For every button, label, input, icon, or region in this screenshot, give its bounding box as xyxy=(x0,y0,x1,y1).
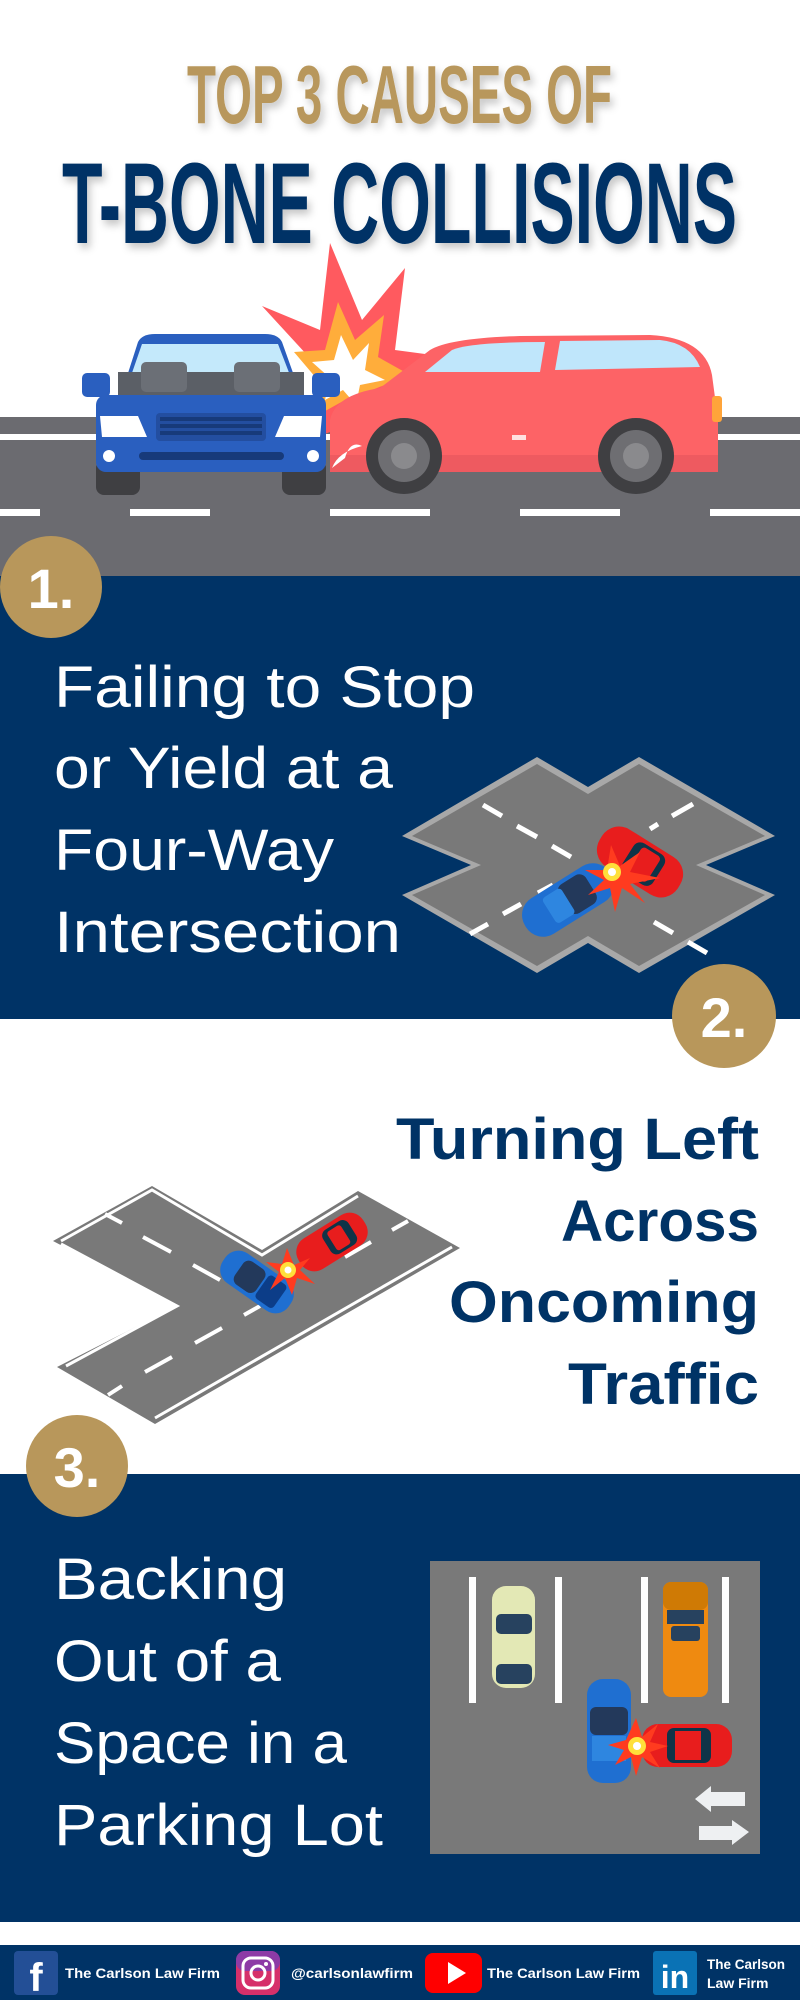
text: cause 2: Turning Left xyxy=(396,1107,759,1172)
panel: cause 3 xyxy=(0,1474,800,1922)
text: cause 1: Intersection xyxy=(54,900,401,965)
illustration: four-way intersection xyxy=(402,757,775,973)
text: cause 2: Across xyxy=(561,1189,759,1254)
footer text: youtube: The Carlson Law Firm xyxy=(487,1965,640,1981)
badge: 1: 1. xyxy=(28,557,74,620)
illustration: parking lot xyxy=(430,1561,760,1854)
text: cause 1: Four-Way xyxy=(54,818,334,883)
footer text: linkedin: Law Firm xyxy=(707,1975,768,1991)
icon: facebook: f xyxy=(29,1956,43,2000)
panel: cause 1 xyxy=(0,576,800,1019)
icon: linkedin xyxy=(653,1951,697,1995)
icon: instagram xyxy=(236,1951,280,1995)
footer xyxy=(0,1945,800,2000)
icon: linkedin: in xyxy=(661,1959,689,1995)
text: cause 3: Backing xyxy=(54,1547,287,1612)
icon: facebook xyxy=(14,1951,58,2000)
text: cause 1: or Yield at a xyxy=(54,736,394,801)
badge: 2: 2. xyxy=(701,986,747,1049)
illustration: T intersection xyxy=(53,1186,460,1424)
text: cause 3: Out of a xyxy=(54,1629,282,1694)
icon: blue car xyxy=(82,334,340,495)
footer text: instagram: @carlsonlawfirm xyxy=(291,1965,413,1981)
icon: youtube xyxy=(425,1953,482,1993)
badge: 1 xyxy=(0,536,102,638)
footer text: linkedin: The Carlson xyxy=(707,1956,785,1972)
badge: 3 xyxy=(26,1415,128,1517)
footer text: linkedin xyxy=(707,1956,785,1991)
text: cause 1 xyxy=(54,655,475,965)
text: cause 3: Parking Lot xyxy=(54,1793,383,1858)
icon: explosion xyxy=(262,243,455,440)
icon: red car xyxy=(330,335,722,494)
text: cause 2: Oncoming xyxy=(449,1270,759,1335)
text: cause 2: Traffic xyxy=(568,1352,759,1417)
road xyxy=(0,417,800,577)
text: cause 1: Failing to Stop xyxy=(54,655,475,720)
text: cause 3: Space in a xyxy=(54,1711,348,1776)
footer text: facebook: The Carlson Law Firm xyxy=(65,1965,220,1981)
text: cause 3 xyxy=(54,1547,383,1858)
badge: 2 xyxy=(672,964,776,1068)
title xyxy=(62,48,737,268)
badge: 3: 3. xyxy=(54,1436,100,1499)
text: cause 2 xyxy=(396,1107,759,1417)
